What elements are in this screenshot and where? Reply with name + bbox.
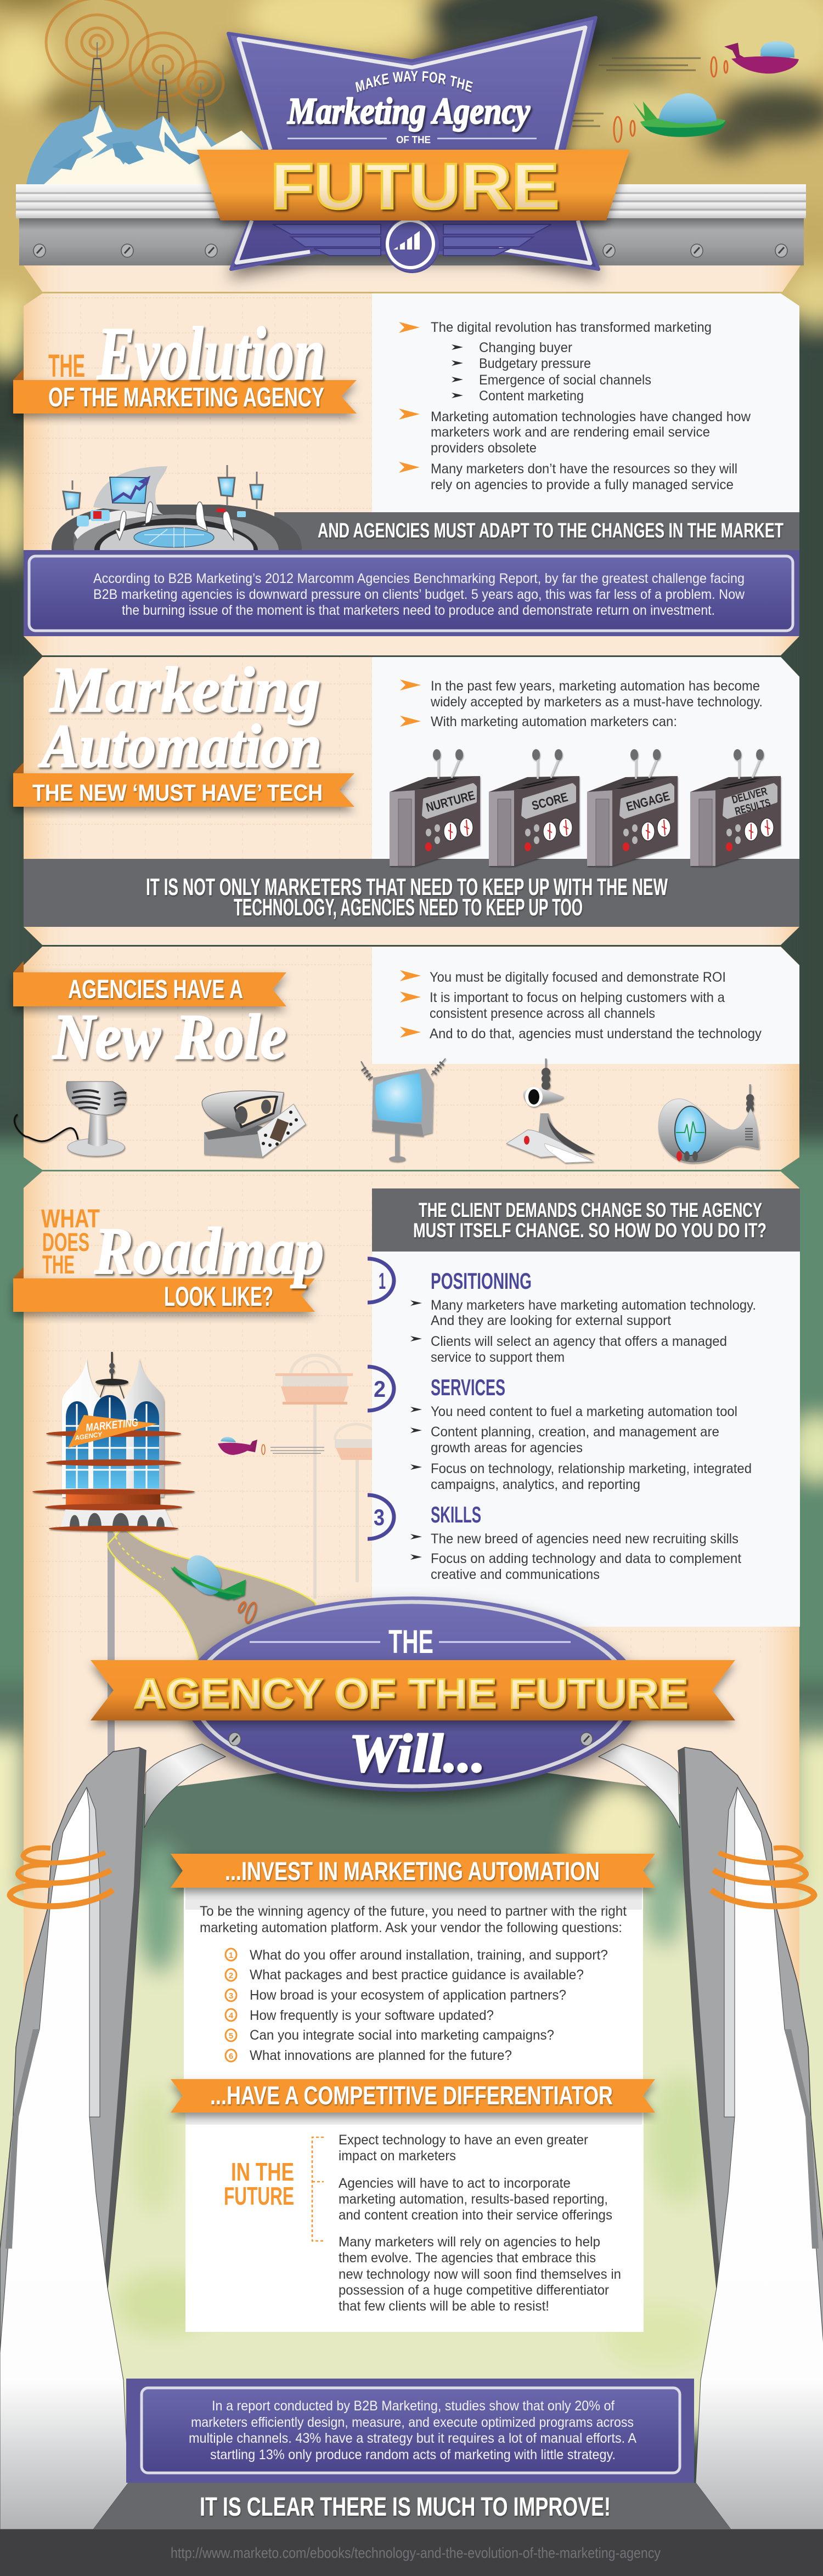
skills text: SKILLS [431,1502,481,1527]
in the future block: new technology now will soon find themselves in [339,2267,621,2282]
header: radio towers and signal rings [46,0,223,133]
section 4: right text panel [368,1188,800,1627]
vendor question list: 2 [229,1971,233,1980]
bottom purple stat box [126,2379,694,2483]
section 4: heading what does the roadmap look like: WHAT [41,1204,100,1233]
right fin [678,1747,823,2529]
section 2: text panel: With marketing automation marketers can: [431,714,677,729]
section 1: heading the evolution of the marketing agency: Evolution [97,312,325,395]
skills text: creative and communications [431,1567,600,1582]
section 1: text panel: Many marketers don’t have the resources so they will [431,461,737,477]
number 1 ring [368,1259,394,1303]
section 4: heading what does the roadmap look like: Roadmap [94,1214,324,1288]
agency tower [32,1352,195,1531]
machine: deliver results [690,749,781,866]
vendor question list [226,1947,608,2063]
section 2: text panel [372,657,799,859]
lower white panel [184,1888,644,2332]
number 2 ring [368,1367,394,1411]
vendor question list: 3 [229,1991,233,2001]
footer with source url: http://www.marketo.com/ebooks/technology-and-the-evolution-of-the-marketing-agency [171,2545,661,2561]
machine: score [489,749,579,866]
section 4: heading what does the roadmap look like [13,1204,324,1312]
text: future: FUTURE [270,150,559,223]
section 1: purple stat box: the burning issue of the moment is that marketers need to produce and demonstrate return on investment. [122,603,715,618]
road and pole [108,1527,329,1755]
skills text [410,1502,741,1582]
positioning text [410,1268,756,1365]
text: the: THE [388,1623,433,1660]
section 1: text panel: rely on agencies to provide a fully managed service [431,477,734,492]
section 1: purple stat box: According to B2B Marketing’s 2012 Marcomm Agencies Benchmarking Report, by far the greatest challenge facing [93,571,745,586]
green saucer on road [171,1549,258,1623]
positioning text: And they are looking for external support [431,1313,671,1328]
skills text: Focus on adding technology and data to complement [431,1551,741,1566]
agency tower: MARKETING [85,1417,139,1434]
number 3 ring: 3 [374,1504,385,1530]
section 2: heading marketing automation: THE NEW ‘MUST HAVE’ TECH [32,780,323,806]
machine: engage [587,749,678,866]
section 1: control room illustration [52,465,302,550]
icon: desk phone with camera [506,1058,595,1163]
ribbon: have a competitive differentiator: ...HAVE A COMPETITIVE DIFFERENTIATOR [210,2081,613,2110]
in the future block: IN THE [231,2158,294,2186]
section 1: gray band [274,512,799,550]
vendor question list: What packages and best practice guidance is available? [250,1967,584,1983]
machine: deliver results: DELIVER [731,785,769,806]
arch supports [144,1744,680,1828]
header: green plane [572,93,725,142]
section 2: heading marketing automation: Automation [38,712,322,780]
cream page panels [24,265,801,1996]
in the future block: them evolve. The agencies that embrace this [339,2250,596,2266]
in the future block [224,2132,621,2314]
section 4: faded background towers [275,1355,379,1599]
vendor question list: How broad is your ecosystem of application partners? [250,1988,566,2003]
section 2: heading marketing automation: Marketing [49,654,320,726]
bottom gray band: IT IS CLEAR THERE IS MUCH TO IMPROVE! [200,2493,611,2522]
vendor question list: 4 [229,2011,234,2020]
section 3: text panel: It is important to focus on helping customers with a [430,990,725,1005]
section 2: text panel: widely accepted by marketers as a must-have technology. [430,694,763,710]
section 2: heading marketing automation [13,654,354,807]
section 4: heading what does the roadmap look like: LOOK LIKE? [164,1281,273,1312]
section 2: gray band: TECHNOLOGY, AGENCIES NEED TO KEEP UP TOO [234,894,583,921]
ribbon: invest in marketing automation [171,1854,655,1888]
invest text: marketing automation platform. Ask your vendor the following questions: [200,1920,622,1935]
in the future block: Agencies will have to act to incorporate [339,2176,571,2191]
section 3: heading agencies have a new role: New Role [52,1001,286,1073]
in the future block: Many marketers will rely on agencies to help [339,2234,600,2250]
left fin [0,1747,146,2529]
positioning text: Clients will select an agency that offers a managed [431,1334,727,1349]
section 1: text panel: Content marketing [479,388,584,404]
text: make way for the: MAKE WAY FOR THE [356,71,473,94]
header: metal bar with screws [16,184,806,265]
header: snowy mountains [26,105,262,184]
section 1: heading the evolution of the marketing agency: OF THE MARKETING AGENCY [48,383,324,412]
section 1: heading the evolution of the marketing agency: THE [48,348,85,384]
section 3: text panel [372,947,799,1064]
services text: growth areas for agencies [431,1440,583,1456]
section 1: purple stat box: B2B marketing agencies is downward pressure on clients’ budget. 5 years ago, this was far less of a problem. Now [93,587,745,602]
in the future block: possession of a huge competitive differentiator [339,2283,609,2298]
header: title badge [219,16,608,287]
icon: retro computer [202,1091,306,1157]
section 1: text panel: providers obsolete [431,440,537,456]
services text: You need content to fuel a marketing automation tool [431,1404,737,1419]
number 1 ring: 1 [379,1268,386,1294]
section 1: heading the evolution of the marketing agency [13,312,357,414]
section 4: heading what does the roadmap look like: THE [42,1250,75,1279]
section 3: heading agencies have a new role [13,961,286,1073]
text: marketing agency: Marketing Agency [287,90,531,132]
machine: deliver results: RESULTS [734,797,772,818]
header: purple plane [599,41,799,77]
section 4: heading what does the roadmap look like: DOES [42,1227,89,1256]
vendor question list: 6 [229,2052,233,2061]
vendor question list: What innovations are planned for the future? [250,2048,512,2063]
machine: engage: ENGAGE [625,789,671,814]
section 1: text panel: The digital revolution has transformed marketing [431,320,712,335]
vendor question list: What do you offer around installation, training, and support? [250,1947,608,1963]
text: of the: OF THE [396,134,431,145]
ribbon: have a competitive differentiator [171,2079,655,2113]
machine: score: SCORE [530,790,570,813]
icon: television on stand [361,1058,446,1162]
vendor question list: 1 [229,1951,233,1960]
bottom purple stat box: multiple channels. 43% have a strategy but it requires a lot of manual efforts. A [189,2431,636,2446]
section 3: text panel: And to do that, agencies must understand the technology [430,1026,762,1041]
in the future block: that few clients will be able to resist! [339,2298,549,2314]
services text: campaigns, analytics, and reporting [431,1477,640,1492]
small purple plane [218,1437,324,1455]
skills text: The new breed of agencies need new recruiting skills [431,1531,739,1547]
bottom purple stat box: startling 13% only produce random acts of marketing with little strategy. [210,2447,616,2462]
machine: nurture: NURTURE [425,788,476,814]
footer with source url [0,2529,823,2576]
in the future block: Expect technology to have an even greater [339,2132,588,2148]
section 2: text panel: In the past few years, marketing automation has become [431,678,760,694]
vendor question list: Can you integrate social into marketing campaigns? [250,2028,554,2043]
text: agency of the future: AGENCY OF THE FUTURE [134,1671,688,1717]
positioning text: service to support them [431,1350,565,1365]
services text: Content planning, creation, and management are [431,1424,719,1440]
section 1: text panel: Changing buyer [479,340,572,355]
in the future block: impact on marketers [339,2148,456,2164]
agency tower: AGENCY [74,1430,103,1442]
agency of the future medallion [91,1596,735,1792]
section 2: gray band [24,859,799,927]
services text: Focus on technology, relationship marketing, integrated [431,1461,752,1476]
number 3 ring [368,1495,394,1539]
section 1: purple stat box [24,550,799,636]
header: orange future banner [197,150,630,223]
services text: SERVICES [431,1374,505,1400]
section 1: text panel [372,293,799,512]
section 3: text panel: consistent presence across all channels [430,1006,655,1021]
bottom gray band [93,2483,731,2529]
in the future block: FUTURE [224,2182,294,2210]
number 2 ring: 2 [374,1376,386,1402]
header: wings and logo medallion [273,216,551,273]
ribbon: invest in marketing automation: ...INVEST IN MARKETING AUTOMATION [225,1856,600,1886]
services text [410,1374,752,1492]
in the future block: and content creation into their service offerings [339,2207,612,2223]
positioning text: Many marketers have marketing automation technology. [431,1298,756,1313]
bottom purple stat box: In a report conducted by B2B Marketing, studies show that only 20% of [212,2398,615,2414]
positioning text: POSITIONING [431,1268,532,1294]
section 3: text panel: You must be digitally focused and demonstrate ROI [430,970,726,985]
bottom purple stat box: marketers efficiently design, measure, and execute optimized programs across [191,2415,634,2430]
vendor question list: 5 [229,2031,233,2041]
text: will: Will... [349,1723,486,1784]
invest text: To be the winning agency of the future, you need to partner with the right [200,1904,627,1919]
section 1: text panel: Emergence of social channels [479,372,651,388]
invest text [200,1904,627,1935]
vendor question list: How frequently is your software updated? [250,2008,494,2023]
icon: microphone [14,1082,126,1156]
section 1: text panel: Budgetary pressure [479,356,591,371]
machine: nurture [390,749,480,866]
gray question box [372,1188,800,1252]
section 1: text panel: Marketing automation technologies have changed how [431,409,751,424]
section 1: text panel: marketers work and are rendering email service [431,424,710,440]
section 3: heading agencies have a new role: AGENCIES HAVE A [68,975,243,1004]
ribbon [91,1660,735,1720]
in the future block: marketing automation, results-based reporting, [339,2192,608,2207]
icon: monitor pod [658,1084,759,1163]
